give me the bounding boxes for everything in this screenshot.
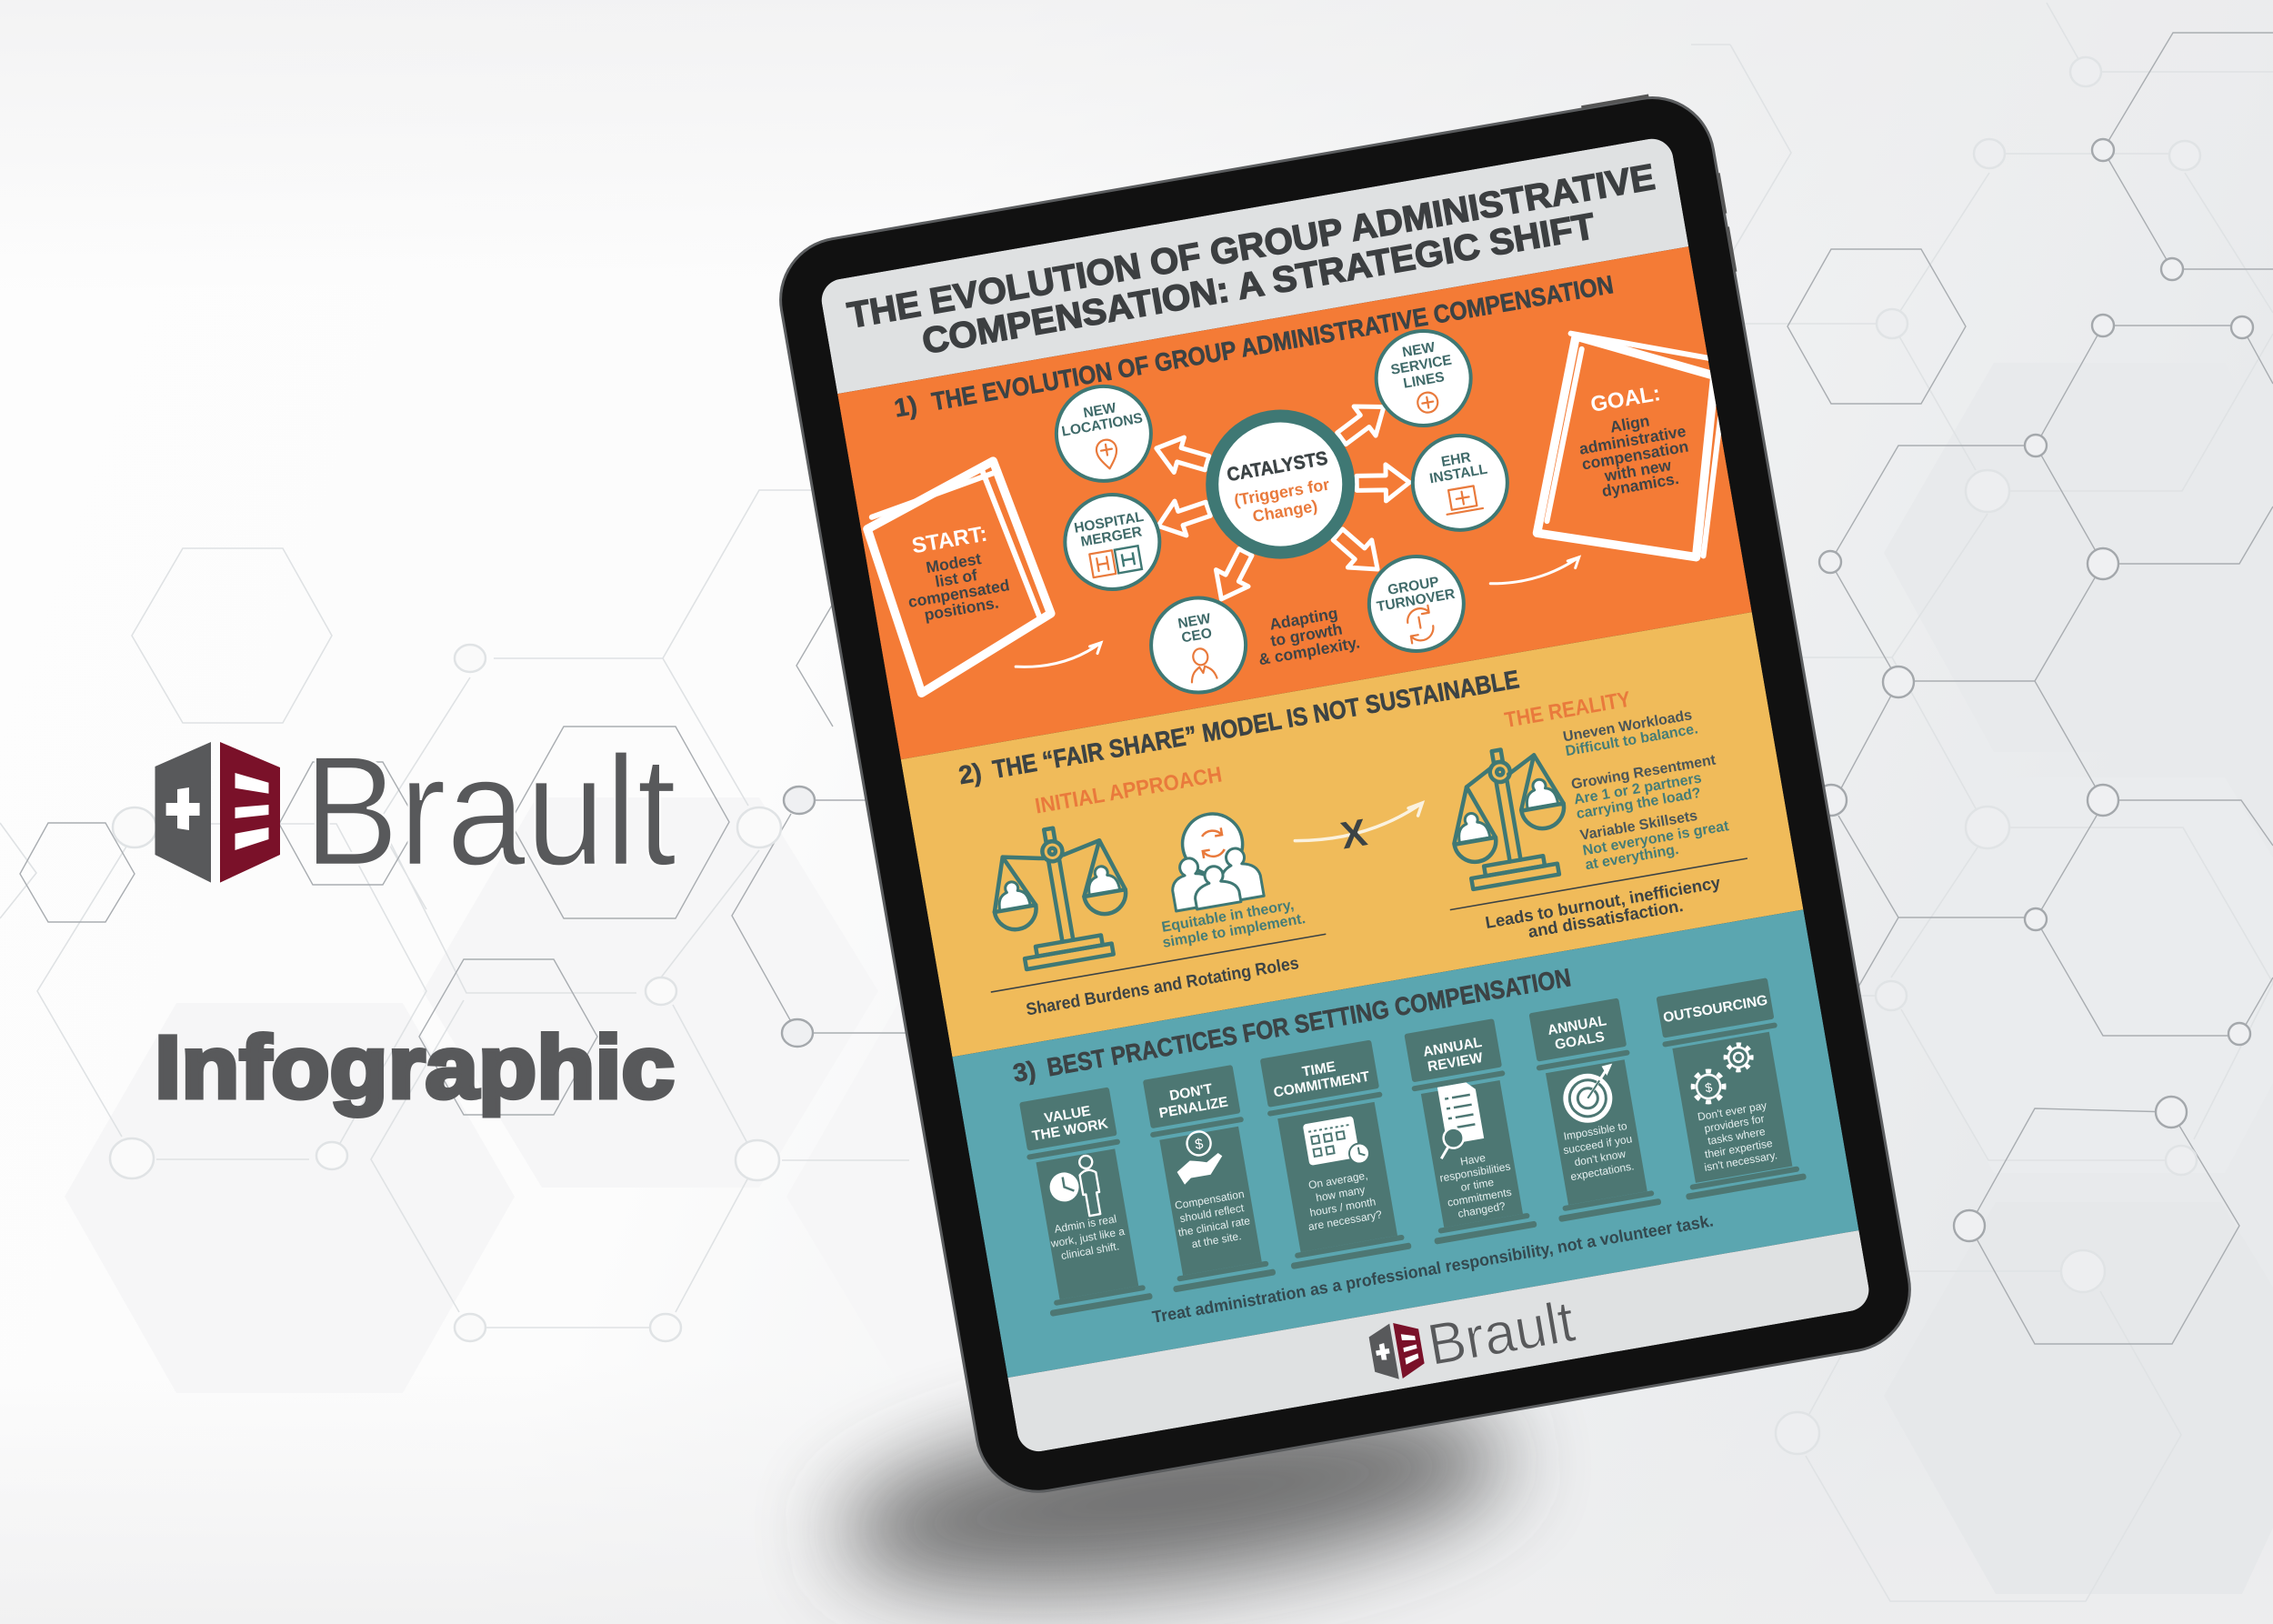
column: outsourcing: their expertise — [1704, 1137, 1774, 1161]
reality list: at everything. — [1584, 842, 1680, 873]
equitable note: Equitable in theory, — [1160, 897, 1295, 936]
icon: rotating team — [1161, 807, 1265, 913]
column: annual review: Have — [1459, 1151, 1487, 1168]
logo wordmark: Brault — [304, 724, 676, 898]
column: time commitment: hours / month — [1308, 1195, 1377, 1219]
new locations — [1055, 384, 1153, 483]
column: don't penalize: Compensation — [1174, 1188, 1246, 1212]
reality list: Are 1 or 2 partners — [1573, 770, 1703, 807]
column: annual review: changed? — [1457, 1199, 1507, 1220]
reality list: Not everyone is great — [1582, 818, 1730, 859]
column: value the work: clinical shift. — [1060, 1239, 1120, 1262]
column: don't penalize: DON'T — [1168, 1081, 1214, 1104]
column: don't penalize: the clinical rate — [1177, 1214, 1251, 1239]
column: time commitment: COMMITMENT — [1272, 1068, 1371, 1100]
goal box: dynamics. — [1600, 469, 1680, 500]
reality list: Variable Skillsets — [1579, 808, 1698, 844]
icon: hand and coin — [1171, 1128, 1226, 1186]
column: don't penalize — [1137, 1064, 1276, 1293]
section 2 heading: THE “FAIR SHARE” MODEL IS NOT SUSTAINABLE — [991, 665, 1521, 784]
column: don't penalize: should reflect — [1178, 1201, 1246, 1225]
section 3 heading: BEST PRACTICES FOR SETTING COMPENSATION — [1045, 963, 1573, 1081]
catalysts hub — [1202, 406, 1359, 563]
icon: clock and person — [1046, 1155, 1103, 1222]
column: annual review: ANNUAL — [1422, 1035, 1483, 1060]
column: annual review: or time — [1460, 1176, 1495, 1194]
column: don't penalize: at the site. — [1190, 1229, 1242, 1250]
tablet shadow — [829, 1372, 1517, 1619]
panel: best practices — [952, 909, 1858, 1378]
footer logo icon — [1367, 1318, 1427, 1383]
panel: evolution — [837, 245, 1761, 759]
icon: gears — [1687, 1043, 1757, 1105]
icon: target — [1558, 1064, 1621, 1127]
adapting note: to growth — [1269, 619, 1344, 650]
logo icon — [155, 742, 280, 883]
icon: laptop — [1443, 485, 1483, 515]
column: value the work: VALUE — [1043, 1103, 1092, 1127]
hospital merger: MERGER — [1079, 524, 1143, 550]
burnout caption: and dissatisfaction. — [1527, 896, 1685, 941]
section 2 heading: 2) — [956, 758, 984, 789]
column: time commitment: how many — [1315, 1183, 1366, 1204]
new service lines: LINES — [1402, 369, 1446, 392]
column: value the work: Admin is real — [1053, 1212, 1117, 1236]
icon: cross — [1417, 391, 1439, 414]
start box: positions. — [923, 593, 1000, 624]
column: annual goals: Impossible to — [1563, 1119, 1628, 1143]
reality list: Difficult to balance. — [1565, 721, 1699, 759]
column: annual goals: expectations. — [1569, 1159, 1635, 1183]
reality list: carrying the load? — [1576, 786, 1702, 822]
tagline: Treat administration as a professional responsibility, not a volunteer task. — [1151, 1210, 1715, 1327]
shared burdens caption: Shared Burdens and Rotating Roles — [1025, 954, 1300, 1020]
reality list: Uneven Workloads — [1562, 707, 1693, 745]
icon: hand and coin: $ — [1194, 1137, 1205, 1153]
adapting note — [1260, 609, 1360, 665]
icon: cycle — [1406, 606, 1436, 644]
icon: gears: $ — [1704, 1079, 1714, 1095]
x mark: X — [1337, 810, 1370, 857]
Infographic heading: Infographic — [155, 1018, 675, 1117]
equitable note: simple to implement. — [1161, 911, 1307, 951]
column: annual review: REVIEW — [1427, 1050, 1484, 1075]
panel: title band — [818, 135, 1688, 394]
column: outsourcing: providers for — [1703, 1112, 1766, 1135]
start box — [859, 456, 1060, 697]
column: outsourcing: tasks where — [1707, 1125, 1767, 1148]
goal box: GOAL: — [1588, 381, 1662, 417]
tablet body — [771, 88, 1919, 1501]
tablet — [771, 86, 1920, 1501]
column: annual goals — [1524, 997, 1661, 1222]
goal box: administrative — [1577, 422, 1687, 458]
column: outsourcing: isn't necessary. — [1703, 1148, 1778, 1174]
tablet side buttons — [1581, 86, 1736, 293]
ehr install: EHR — [1440, 450, 1472, 470]
column: annual goals: GOALS — [1554, 1029, 1606, 1053]
burnout caption: Leads to burnout, inefficiency — [1484, 873, 1722, 932]
catalysts hub: Change) — [1251, 496, 1319, 526]
column: value the work — [1014, 1086, 1153, 1317]
icon: tilted scale — [1440, 741, 1576, 891]
initial approach label: INITIAL APPROACH — [1033, 762, 1224, 819]
new service lines — [1375, 329, 1473, 427]
ehr install: INSTALL — [1428, 462, 1488, 486]
new ceo: NEW — [1177, 611, 1212, 632]
arrow: transition — [1292, 803, 1426, 845]
divider — [1450, 858, 1747, 910]
new locations: NEW — [1082, 400, 1117, 421]
column: annual review: responsibilities — [1438, 1160, 1511, 1185]
catalysts hub: (Triggers for — [1233, 476, 1331, 509]
adapting note: & complexity. — [1257, 633, 1361, 668]
new service lines: NEW — [1401, 339, 1437, 360]
section 1 heading: THE EVOLUTION OF GROUP ADMINISTRATIVE COMPENSATION — [930, 270, 1616, 416]
column: don't penalize: PENALIZE — [1158, 1094, 1229, 1121]
goal box — [1533, 331, 1721, 562]
column: outsourcing — [1652, 977, 1807, 1200]
new ceo — [1149, 596, 1247, 695]
title: COMPENSATION: A STRATEGIC SHIFT — [919, 206, 1598, 362]
the reality label: THE REALITY — [1503, 687, 1632, 733]
Brault logo — [155, 724, 676, 898]
column: value the work: THE WORK — [1031, 1116, 1110, 1144]
group turnover — [1367, 555, 1466, 653]
ehr install — [1411, 433, 1509, 532]
icon: person — [1187, 647, 1217, 682]
goal box: with new — [1602, 456, 1673, 486]
column: annual goals: succeed if you — [1562, 1132, 1633, 1157]
screen — [818, 134, 1881, 1455]
hospital merger — [1063, 493, 1162, 591]
column: outsourcing: Don't ever pay — [1697, 1098, 1767, 1123]
column: time commitment — [1256, 1039, 1412, 1269]
goal box: Align — [1608, 411, 1651, 436]
panel: fair share — [901, 612, 1803, 1057]
icon: hospitals — [1089, 546, 1142, 577]
column: annual review — [1398, 1018, 1537, 1245]
reality list — [1562, 705, 1733, 873]
goal box: compensation — [1580, 437, 1690, 474]
panel: footer band — [1007, 1230, 1872, 1455]
column: value the work: work, just like a — [1049, 1225, 1126, 1250]
arrow: goal — [1488, 557, 1581, 586]
catalyst arrows — [1154, 404, 1411, 602]
column: time commitment: On average, — [1307, 1168, 1368, 1191]
catalysts hub: CATALYSTS — [1226, 447, 1329, 486]
new service lines: SERVICE — [1389, 353, 1453, 378]
start box: list of — [934, 566, 978, 591]
new locations: LOCATIONS — [1060, 410, 1144, 440]
column: time commitment: are necessary? — [1307, 1208, 1383, 1233]
hospital merger: HOSPITAL — [1073, 509, 1145, 536]
icon: calendar — [1303, 1114, 1371, 1172]
footer logo wordmark: Brault — [1423, 1288, 1579, 1378]
section 3 heading: 3) — [1011, 1056, 1038, 1088]
column: annual goals: don't know — [1573, 1148, 1627, 1168]
arrow: start — [1014, 643, 1103, 670]
column: time commitment: TIME — [1301, 1059, 1337, 1080]
start box: compensated — [906, 576, 1011, 611]
reality list: Growing Resentment — [1570, 752, 1717, 793]
column: annual review: commitments — [1447, 1186, 1513, 1209]
title: THE EVOLUTION OF GROUP ADMINISTRATIVE — [845, 157, 1657, 336]
column: outsourcing: OUTSOURCING — [1662, 993, 1768, 1026]
new ceo: CEO — [1180, 626, 1213, 646]
icon: balanced scale — [982, 817, 1136, 973]
column: annual goals: ANNUAL — [1547, 1013, 1607, 1038]
icon: document and magnifier — [1429, 1081, 1487, 1158]
divider — [991, 934, 1326, 992]
start box: START: — [910, 522, 989, 558]
adapting note: Adapting — [1268, 604, 1339, 634]
start box: Modest — [925, 549, 983, 576]
group turnover: TURNOVER — [1376, 586, 1457, 615]
group turnover: GROUP — [1387, 575, 1440, 598]
section 1 heading: 1) — [892, 391, 919, 423]
footer logo — [1367, 1288, 1579, 1388]
icon: map pin — [1095, 438, 1118, 469]
